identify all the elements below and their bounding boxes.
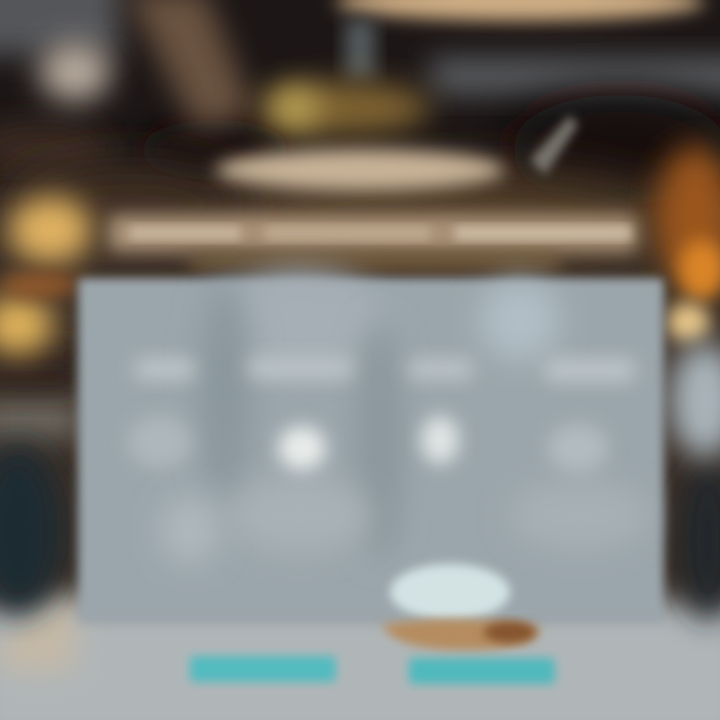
teal button left bbox=[190, 656, 336, 682]
row one labels bbox=[135, 356, 635, 382]
dark shapes at the sides bbox=[0, 342, 720, 620]
hanging light fixture bbox=[215, 20, 578, 191]
glowing lamps, left bbox=[0, 196, 92, 355]
coffee cup bbox=[382, 564, 540, 650]
row two icons bbox=[128, 416, 608, 472]
title band bbox=[108, 214, 638, 268]
panel: main grid bbox=[78, 270, 664, 623]
panel shading bbox=[160, 270, 650, 564]
glowing lamps, right bbox=[666, 240, 720, 342]
saucer and pastry bbox=[382, 619, 540, 650]
teal button right bbox=[409, 658, 555, 684]
ceiling lamp bbox=[335, 0, 705, 21]
lower room: table surface bbox=[0, 590, 720, 720]
pastry highlight bbox=[484, 621, 536, 643]
